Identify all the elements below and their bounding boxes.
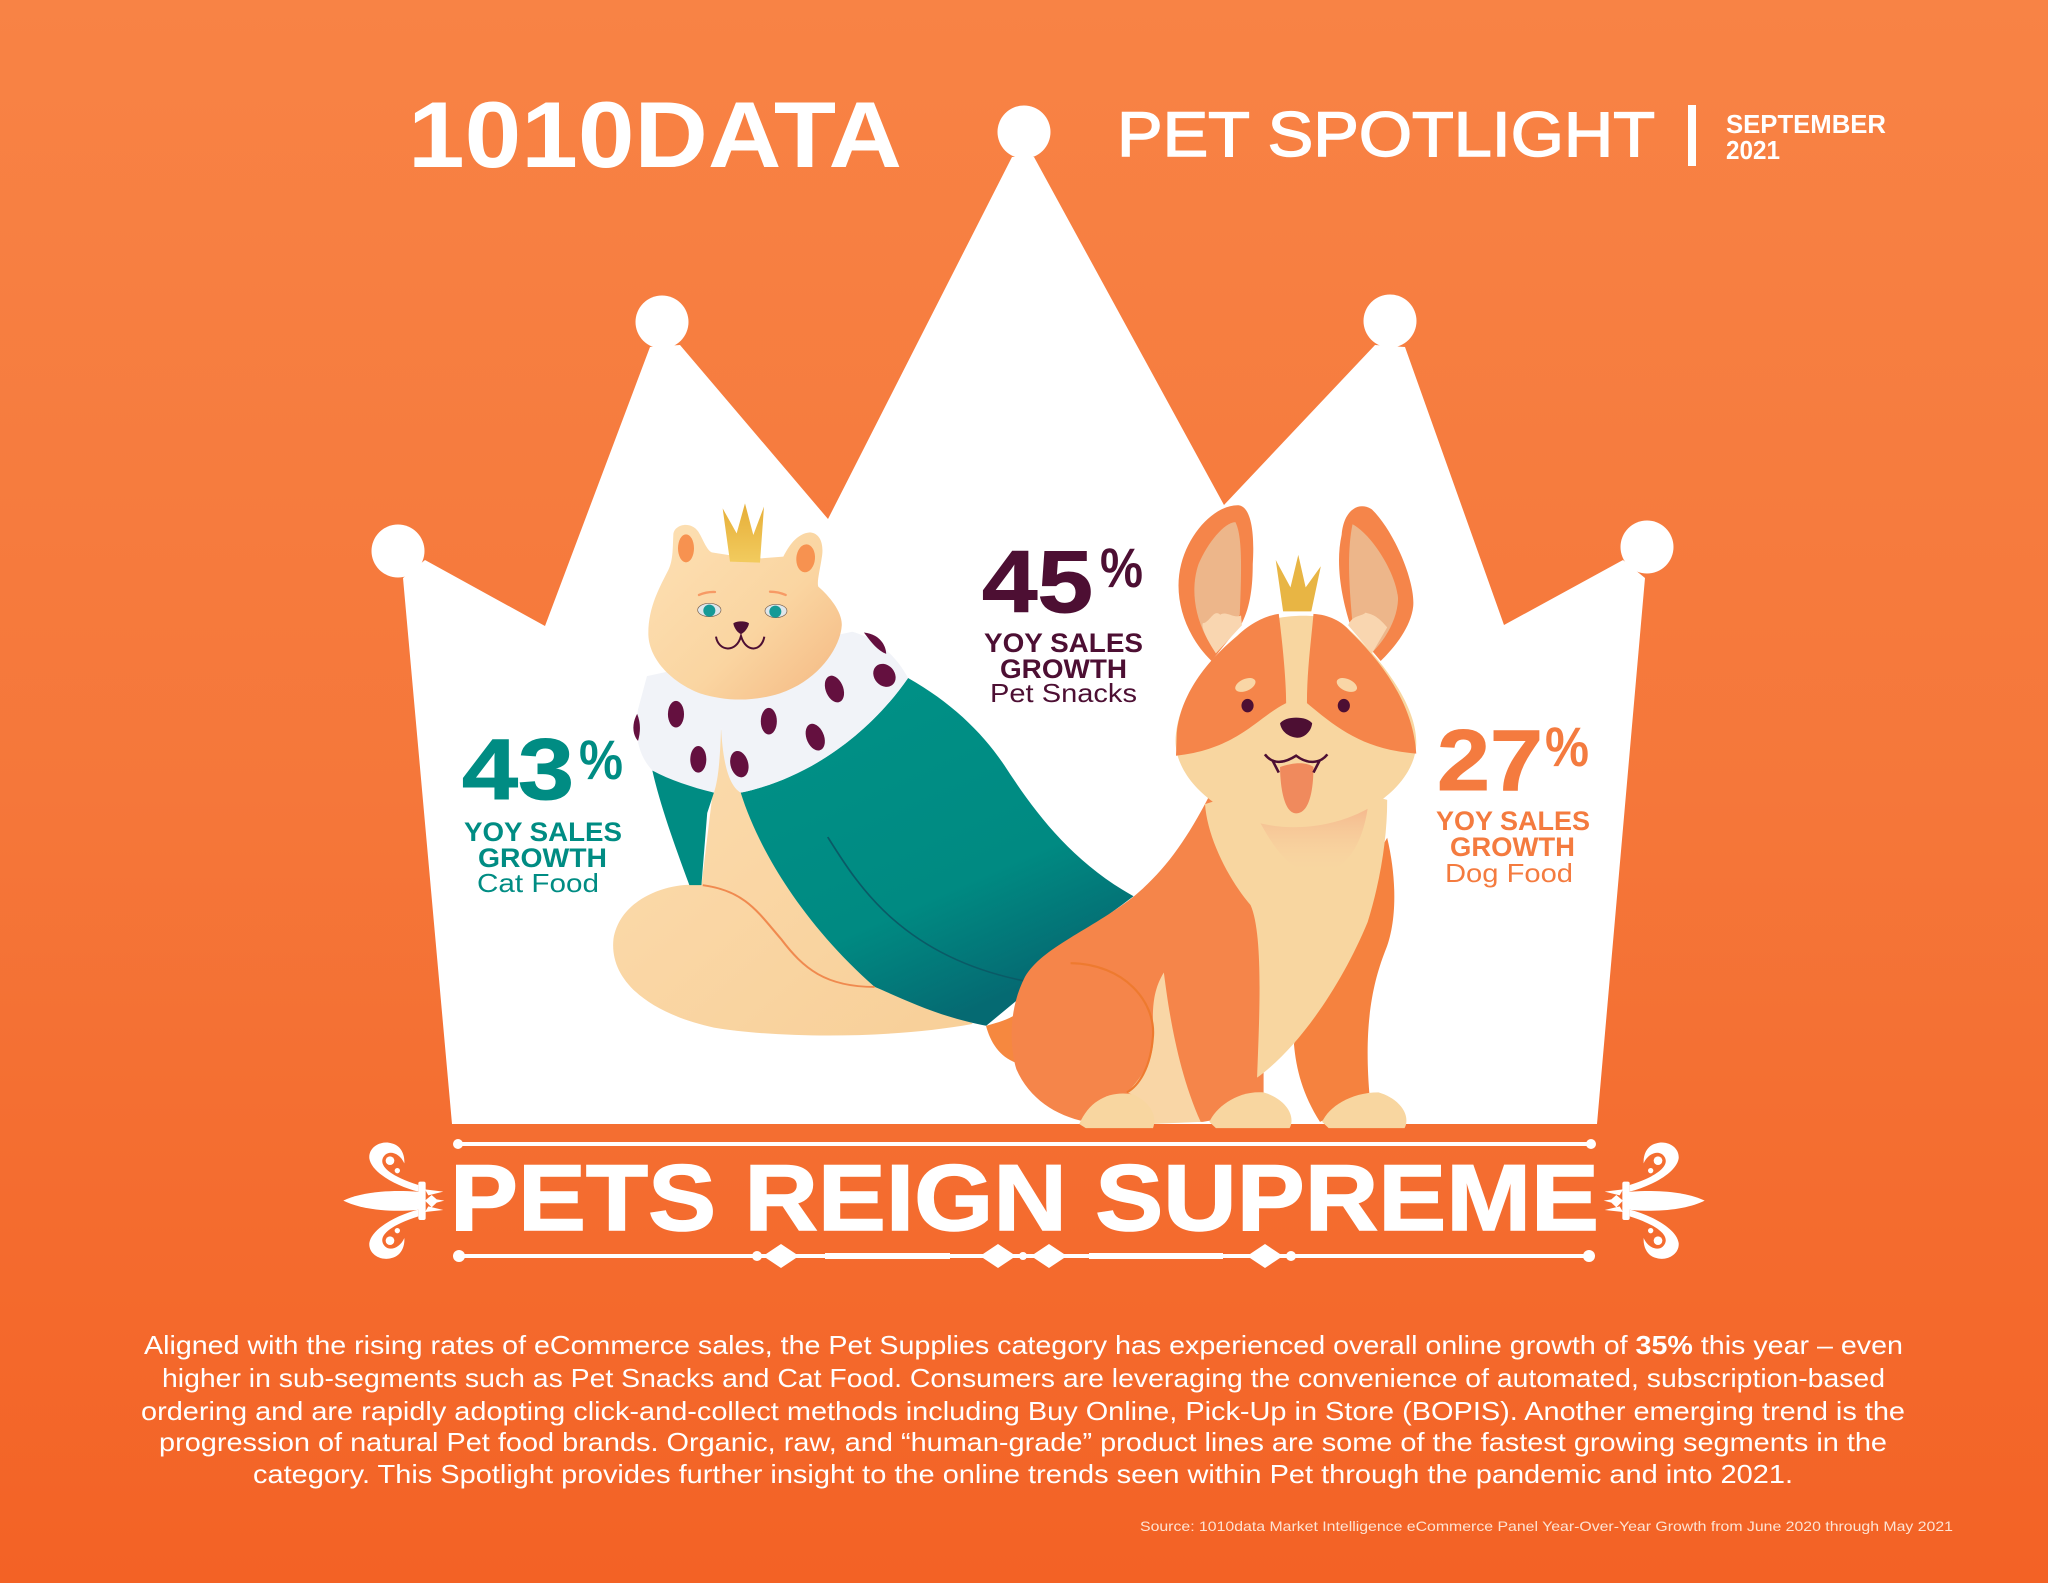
dog hind body	[1012, 796, 1264, 1122]
tail line	[703, 885, 875, 987]
cape fold line	[828, 837, 1026, 981]
stat: 45% pet snacks: %	[1100, 536, 1143, 599]
cat head	[648, 525, 842, 700]
stat: 27% dog food: Dog Food	[1445, 858, 1573, 888]
heading: pet spotlight: PET SPOTLIGHT	[1117, 100, 1655, 170]
ornament: right fleur	[1604, 1142, 1705, 1259]
ornament: left fleur	[343, 1142, 444, 1259]
source note: Source: 1010data Market Intelligence eCommerce Panel Year-Over-Year Growth from June 2020 through May 2021	[1140, 1518, 1953, 1534]
stat: 45% pet snacks: Pet Snacks	[990, 678, 1137, 708]
collar spots	[633, 632, 899, 779]
stat: 27% dog food: %	[1545, 715, 1589, 778]
body paragraph: ordering and are rapidly adopting click-and-collect methods including Buy Online, Pick-Up in Store (BOPIS). Another emerging trend is the	[141, 1396, 1905, 1426]
stat: 43% cat food: GROWTH	[478, 843, 607, 873]
heading: pet spotlight: SEPTEMBER	[1726, 109, 1886, 139]
dog chest	[1205, 775, 1387, 1078]
illustration: corgi dog	[986, 505, 1416, 1128]
cape right side	[741, 678, 1134, 1026]
stat: 27% dog food: 27	[1437, 713, 1543, 809]
stat: 27% dog food	[1436, 713, 1590, 888]
dog tail	[986, 1012, 1019, 1063]
cat head group	[648, 503, 842, 700]
right ear	[1339, 506, 1413, 661]
hind leg line	[1071, 963, 1153, 1092]
stat: 43% cat food: Cat Food	[477, 868, 599, 898]
title banner rules	[453, 1139, 1596, 1268]
heading: pet spotlight: 2021	[1726, 135, 1780, 165]
body paragraph	[141, 1330, 1905, 1489]
dog far leg	[1294, 838, 1394, 1122]
cat ears inner	[678, 534, 816, 573]
title: PETS REIGN SUPREME	[450, 1145, 1599, 1250]
dog head	[1176, 614, 1416, 827]
stat: 45% pet snacks: 45	[982, 532, 1093, 631]
stat: 43% cat food: YOY SALES	[464, 817, 622, 847]
body paragraph: Aligned with the rising rates of eCommerce sales, the Pet Supplies category has experienced overall online growth of 35% this year – even	[144, 1330, 1903, 1360]
heading: pet spotlight	[1117, 100, 1886, 170]
dog paws	[1079, 1092, 1406, 1128]
dog face	[1233, 675, 1359, 813]
dog crown	[1276, 555, 1321, 611]
dog belly patch	[1127, 972, 1201, 1124]
left ear	[1179, 505, 1253, 661]
body paragraph: higher in sub-segments such as Pet Snacks and Cat Food. Consumers are leveraging the convenience of automated, subscription-based	[162, 1363, 1885, 1393]
neck shadow	[1257, 808, 1368, 876]
body paragraph: category. This Spotlight provides further insight to the online trends seen within Pet through the pandemic and into 2021.	[253, 1459, 1793, 1489]
ermine collar	[637, 632, 908, 793]
stat: 27% dog food: YOY SALES	[1436, 806, 1590, 836]
crown shape	[372, 106, 1674, 1124]
illustration: cat with cape	[613, 503, 1134, 1036]
logo: 1010data: 1010DATA	[408, 82, 902, 187]
stat: 43% cat food: %	[579, 728, 623, 791]
cape left side	[652, 770, 714, 885]
cat crown	[723, 503, 764, 563]
cat face	[698, 592, 787, 648]
stat: 45% pet snacks: YOY SALES	[984, 628, 1143, 658]
stat: 27% dog food: GROWTH	[1450, 832, 1575, 862]
stat: 45% pet snacks	[982, 532, 1143, 708]
body paragraph: progression of natural Pet food brands. Organic, raw, and “human-grade” product lines are some of the fastest growing segments in the	[159, 1427, 1887, 1457]
stat: 43% cat food	[462, 722, 623, 898]
cat body	[613, 728, 973, 1036]
stat: 43% cat food: 43	[462, 722, 574, 818]
stat: 45% pet snacks: GROWTH	[1000, 654, 1127, 684]
